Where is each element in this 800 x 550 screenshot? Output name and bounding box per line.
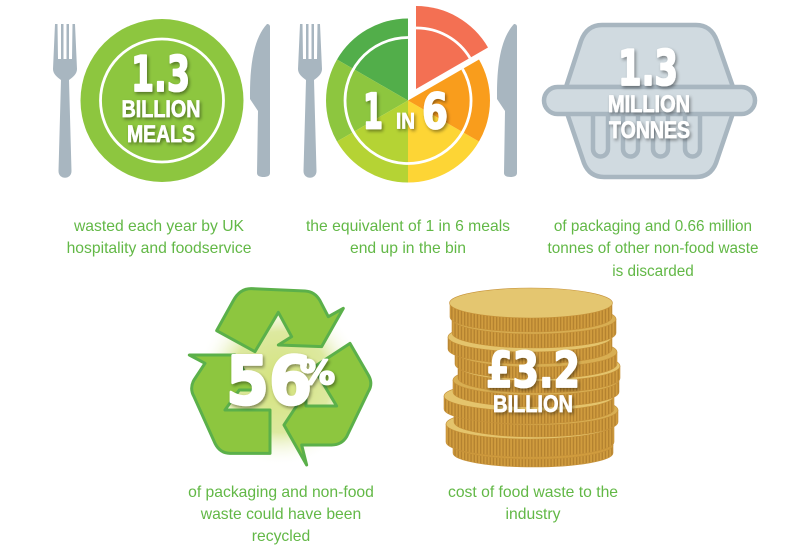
stat: 1.3 million tonnes: 1.3 <box>618 40 678 97</box>
stat: 1.3 billion meals: BILLION <box>122 96 200 123</box>
caption: could have been recycled: of packaging and non-food <box>188 484 374 501</box>
icon: green plate <box>80 19 244 182</box>
stat: 1.3 million tonnes: MILLION <box>608 91 690 118</box>
stat: £3.2 billion <box>486 342 580 418</box>
icon: coin stack <box>444 288 620 467</box>
caption: could have been recycled: waste could have been <box>200 506 361 523</box>
stat: 1 in 6: 1 <box>363 84 383 140</box>
icon: food container <box>544 25 755 177</box>
panel: 1.3 million tonnes packaging <box>544 25 755 177</box>
panel: 1 in 6 plate <box>298 6 517 183</box>
icon: fork <box>53 24 77 178</box>
stat: 1 in 6 <box>363 84 448 140</box>
panel: 56% recycling <box>189 289 371 466</box>
chart: plate segments <box>326 6 490 183</box>
stat: 1 in 6: 6 <box>422 84 448 140</box>
caption: 1 in 6 meals: the equivalent of 1 in 6 meals <box>306 218 510 235</box>
stat: 1.3 billion meals: MEALS <box>127 121 195 148</box>
stat: 1.3 million tonnes: TONNES <box>609 117 690 144</box>
panel: 1.3 billion meals plate <box>53 19 270 182</box>
icon: fork <box>298 24 322 178</box>
panel: 3.2 billion coins <box>444 288 620 467</box>
stat: 1.3 billion meals <box>122 46 200 148</box>
stat: £3.2 billion: £3.2 <box>486 342 580 399</box>
stat: 56%: % <box>300 353 335 392</box>
caption: packaging discarded: tonnes of other non-food waste <box>548 240 758 257</box>
icon: recycling arrows <box>189 289 371 465</box>
icon: knife <box>250 24 270 177</box>
stat: 1.3 billion meals: 1.3 <box>131 46 190 103</box>
stat: £3.2 billion: BILLION <box>493 391 573 418</box>
stat: 1 in 6: IN <box>396 108 415 134</box>
caption: packaging discarded: of packaging and 0.66 million <box>554 218 752 235</box>
caption: packaging discarded: is discarded <box>612 263 694 280</box>
icon: knife <box>497 24 517 177</box>
stat: 56%: 56 <box>226 342 312 420</box>
caption: 1 in 6 meals: end up in the bin <box>350 240 466 257</box>
caption: wasted each year: wasted each year by UK <box>73 218 245 235</box>
caption: could have been recycled: recycled <box>252 528 310 545</box>
icon: recycling glow <box>196 298 364 466</box>
caption: cost of food waste: cost of food waste to the <box>448 484 618 501</box>
caption: cost of food waste: industry <box>506 506 561 523</box>
caption: wasted each year: hospitality and foodservice <box>67 240 252 257</box>
stat: 1.3 million tonnes <box>608 40 690 144</box>
chart: removed red slice <box>416 6 488 89</box>
